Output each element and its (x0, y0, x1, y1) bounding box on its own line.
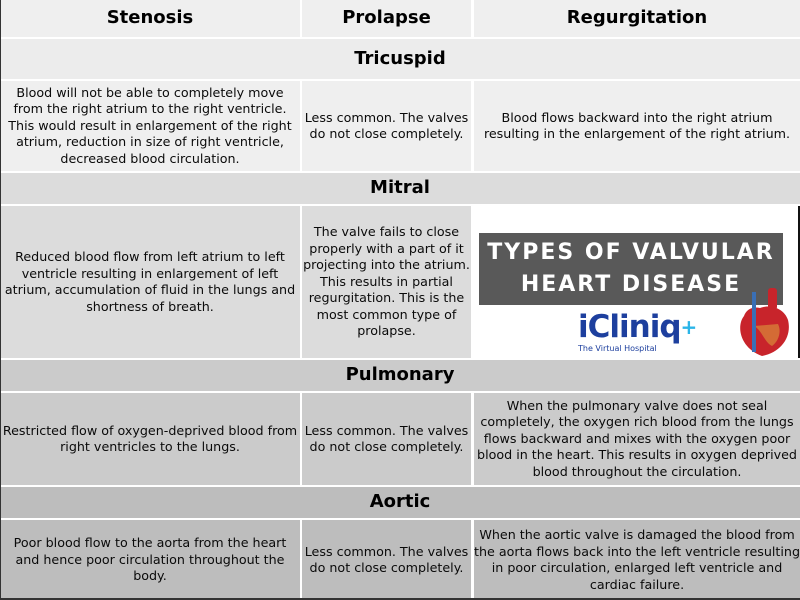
pulmonary regurgitation: blood throughout the circulation. (533, 464, 741, 479)
mitral stenosis: shortness of breath. (86, 298, 214, 314)
mitral stenosis: ventricle resulting in enlargement of left (22, 266, 278, 280)
logo: iCliniq: iCliniq+ (578, 309, 696, 345)
pulmonary stenosis: Restricted flow of oxygen-deprived blood from (3, 422, 297, 438)
tricuspid stenosis: This would result in enlargement of the right (8, 118, 292, 133)
tricuspid stenosis: decreased blood circulation. (60, 151, 240, 166)
mitral prolapse: projecting into the atrium. (303, 257, 470, 272)
mitral stenosis (0, 206, 300, 358)
aortic stenosis (0, 520, 300, 600)
mitral stenosis: Reduced blood flow from left atrium to left (15, 249, 285, 264)
tricuspid regurgitation (474, 81, 800, 171)
header: Regurgitation (474, 0, 800, 37)
pulmonary regurgitation: When the pulmonary valve does not seal (507, 398, 767, 413)
section heading: Mitral (0, 173, 800, 204)
mitral prolapse: prolapse. (357, 323, 416, 338)
aortic regurgitation: the aorta flows back into the left ventricle resulting (474, 544, 800, 558)
aortic regurgitation: When the aortic valve is damaged the blood from (479, 527, 795, 542)
pulmonary stenosis: right ventricles to the lungs. (60, 439, 240, 454)
icon: heart (740, 288, 789, 356)
pulmonary prolapse: Less common. The valves (305, 422, 468, 438)
mitral prolapse: regurgitation. This is the (309, 290, 464, 305)
aortic regurgitation: cardiac failure. (590, 576, 684, 592)
section heading: Pulmonary (0, 360, 800, 391)
pulmonary stenosis (0, 393, 300, 485)
pulmonary regurgitation: completely, the oxygen rich blood from the lungs (480, 414, 794, 429)
aortic regurgitation (474, 520, 800, 600)
header: Prolapse (302, 0, 471, 37)
aortic prolapse: Less common. The valves (305, 544, 468, 558)
tricuspid regurgitation: Blood flows backward into the right atrium (502, 110, 772, 124)
section heading: Mitral: Mitral (370, 177, 430, 198)
title banner: HEART DISEASE (521, 272, 741, 297)
section heading: Aortic (0, 487, 800, 518)
tricuspid stenosis: from the right atrium to the right ventricle. (13, 101, 287, 116)
header: Stenosis: Stenosis (107, 7, 193, 28)
mitral prolapse: The valve fails to close (314, 224, 459, 239)
brand panel (474, 206, 800, 358)
header: Stenosis (0, 0, 300, 37)
pulmonary prolapse (302, 393, 471, 485)
aortic stenosis: body. (133, 568, 167, 583)
header: Prolapse: Prolapse (342, 7, 431, 28)
aortic prolapse: do not close completely. (310, 560, 463, 575)
mitral stenosis: atrium, accumulation of fluid in the lungs and (5, 282, 295, 297)
logo: iCliniq: The Virtual Hospital (578, 344, 657, 353)
mitral prolapse: properly with a part of it (309, 241, 464, 256)
mitral prolapse: most common type of (317, 307, 456, 322)
section heading: Tricuspid: Tricuspid (354, 48, 446, 69)
aortic prolapse (302, 520, 471, 600)
section heading: Aortic: Aortic (370, 491, 430, 512)
tricuspid stenosis (0, 81, 300, 171)
tricuspid prolapse: Less common. The valves (305, 110, 468, 124)
pulmonary regurgitation: flows backward and mixes with the oxygen poor (484, 431, 790, 446)
tricuspid prolapse (302, 81, 471, 171)
aortic stenosis: Poor blood flow to the aorta from the heart (14, 535, 286, 550)
mitral prolapse (302, 206, 471, 358)
header: Regurgitation: Regurgitation (567, 7, 707, 28)
aortic stenosis: and hence poor circulation throughout the (15, 552, 284, 567)
tricuspid stenosis: Blood will not be able to completely move (16, 85, 284, 100)
section heading: Pulmonary: Pulmonary (346, 364, 454, 385)
tricuspid prolapse: do not close completely. (310, 126, 463, 141)
section heading: Tricuspid (0, 39, 800, 79)
pulmonary prolapse: do not close completely. (310, 439, 463, 454)
title banner (479, 233, 783, 305)
title banner: TYPES OF VALVULAR (487, 240, 775, 265)
pulmonary regurgitation (474, 393, 800, 485)
mitral prolapse: This results in partial (320, 274, 453, 289)
aortic regurgitation: in poor circulation, enlarged left ventricle and (492, 560, 782, 575)
tricuspid stenosis: atrium, reduction in size of right ventricle, (16, 134, 284, 149)
tricuspid regurgitation: resulting in the enlargement of the right atrium. (484, 126, 790, 141)
pulmonary regurgitation: blood in the heart. This results in oxygen deprived (477, 447, 797, 462)
